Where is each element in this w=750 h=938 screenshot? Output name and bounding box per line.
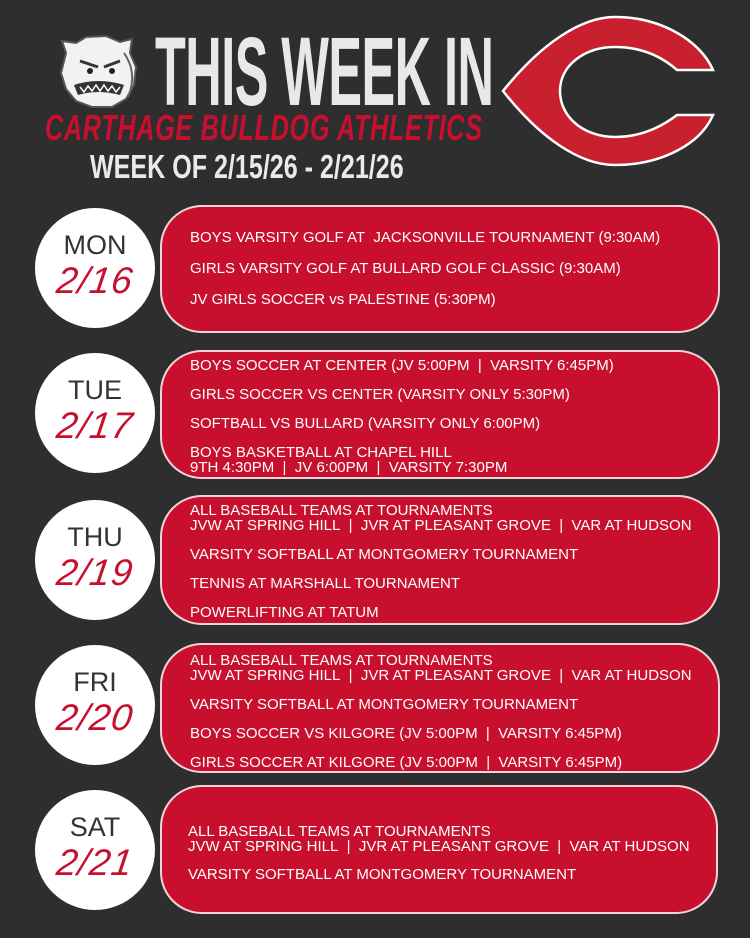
logo: red C [502, 16, 715, 166]
subtitle: CARTHAGE BULLDOG ATHLETICS [45, 107, 483, 148]
panel: tuesday events: BOYS SOCCER AT CENTER (JV 5:00PM | VARSITY 6:45PM) [190, 357, 614, 374]
panel: saturday events: ALL BASEBALL TEAMS AT TOURNAMENTS [188, 823, 491, 840]
badge: SAT 2/21 [35, 790, 155, 910]
panel: tuesday events: BOYS BASKETBALL AT CHAPEL HILL [190, 444, 452, 461]
panel: tuesday events: GIRLS SOCCER VS CENTER (VARSITY ONLY 5:30PM) [190, 386, 570, 403]
panel: monday events: GIRLS VARSITY GOLF AT BULLARD GOLF CLASSIC (9:30AM) [190, 260, 621, 277]
badge: THU 2/19: 2/19 [54, 552, 136, 593]
panel: tuesday events: 9TH 4:30PM | JV 6:00PM | VARSITY 7:30PM [190, 459, 507, 476]
panel: thursday events [160, 495, 720, 625]
badge: THU 2/19: THU [67, 522, 123, 552]
panel: friday events: BOYS SOCCER VS KILGORE (JV 5:00PM | VARSITY 6:45PM) [190, 725, 622, 742]
panel: saturday events: VARSITY SOFTBALL AT MONTGOMERY TOURNAMENT [188, 866, 576, 883]
panel: saturday events: JVW AT SPRING HILL | JVR AT PLEASANT GROVE | VAR AT HUDSON [188, 838, 690, 855]
badge: SAT 2/21: SAT [70, 812, 120, 842]
badge: TUE 2/17: TUE [68, 375, 122, 405]
panel: friday events: GIRLS SOCCER AT KILGORE (JV 5:00PM | VARSITY 6:45PM) [190, 754, 622, 771]
panel: thursday events: POWERLIFTING AT TATUM [190, 604, 379, 621]
icon: bulldog mascot [60, 35, 137, 108]
badge: TUE 2/17: 2/17 [54, 405, 136, 446]
badge: MON 2/16: 2/16 [54, 260, 136, 301]
week of date range: WEEK OF 2/15/26 - 2/21/26 [90, 148, 404, 185]
badge: TUE 2/17 [35, 353, 155, 473]
panel: monday events: JV GIRLS SOCCER vs PALESTINE (5:30PM) [190, 291, 496, 308]
panel: monday events: BOYS VARSITY GOLF AT JACKSONVILLE TOURNAMENT (9:30AM) [190, 229, 660, 246]
badge: MON 2/16 [35, 208, 155, 328]
badge: FRI 2/20: 2/20 [54, 697, 136, 738]
badge: MON 2/16: MON [64, 230, 126, 260]
badge: FRI 2/20: FRI [73, 667, 117, 697]
badge: SAT 2/21: 2/21 [54, 842, 136, 883]
panel: tuesday events [160, 350, 720, 479]
panel: friday events: VARSITY SOFTBALL AT MONTGOMERY TOURNAMENT [190, 696, 578, 713]
badge: FRI 2/20 [35, 645, 155, 765]
panel: thursday events: JVW AT SPRING HILL | JVR AT PLEASANT GROVE | VAR AT HUDSON [190, 517, 692, 534]
panel: friday events: JVW AT SPRING HILL | JVR AT PLEASANT GROVE | VAR AT HUDSON [190, 667, 692, 684]
badge: THU 2/19 [35, 500, 155, 620]
panel: tuesday events: SOFTBALL VS BULLARD (VARSITY ONLY 6:00PM) [190, 415, 540, 432]
panel: friday events [160, 643, 720, 773]
panel: thursday events: ALL BASEBALL TEAMS AT TOURNAMENTS [190, 502, 493, 519]
title: THIS WEEK IN [155, 17, 493, 126]
panel: saturday events [160, 785, 718, 914]
panel: friday events: ALL BASEBALL TEAMS AT TOURNAMENTS [190, 652, 493, 669]
panel: monday events [160, 205, 720, 333]
panel: thursday events: VARSITY SOFTBALL AT MONTGOMERY TOURNAMENT [190, 546, 578, 563]
panel: thursday events: TENNIS AT MARSHALL TOURNAMENT [190, 575, 460, 592]
